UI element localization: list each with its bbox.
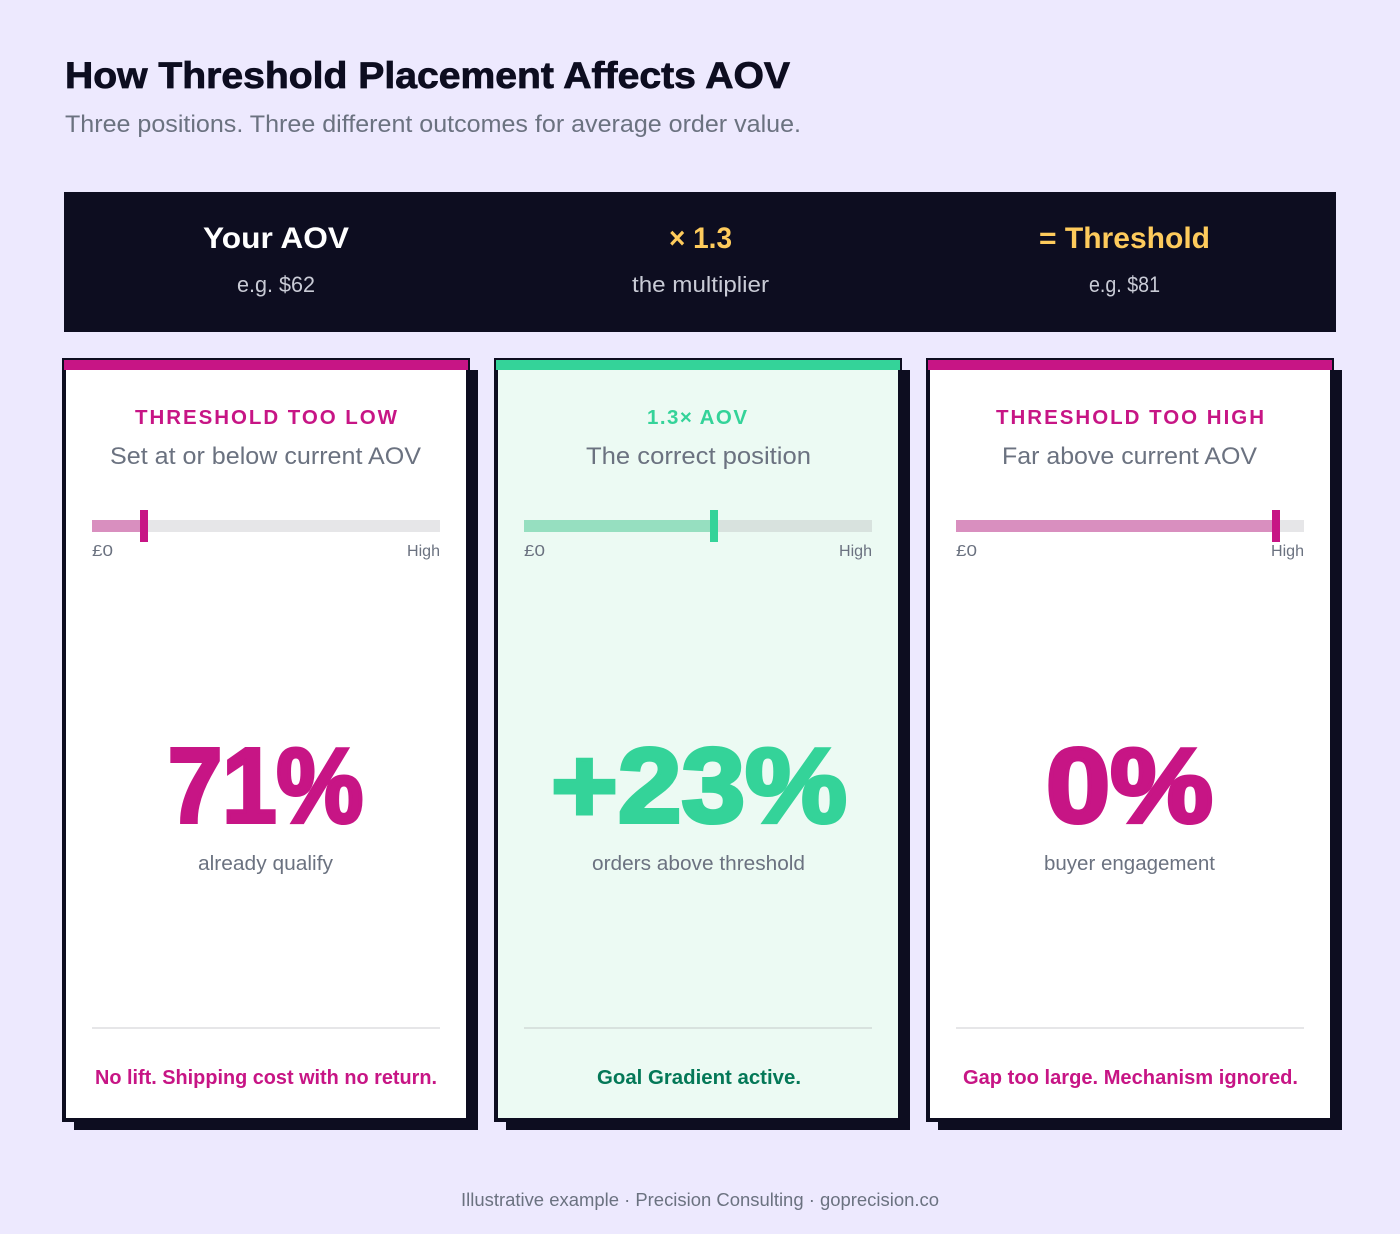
verdict: Gap too large. Mechanism ignored. bbox=[963, 1067, 1298, 1089]
panel description: Set at or below current AOV bbox=[110, 443, 421, 470]
panel heading: 1.3× AOV bbox=[647, 406, 747, 429]
formula: threshold: e.g. $81 bbox=[1089, 272, 1160, 297]
formula: your AOV bbox=[203, 222, 349, 297]
formula: your AOV: e.g. $62 bbox=[237, 272, 315, 297]
panel heading: THRESHOLD TOO LOW bbox=[135, 406, 398, 429]
formula: your AOV: Your AOV bbox=[203, 222, 349, 255]
panel heading: THRESHOLD TOO HIGH bbox=[996, 406, 1264, 429]
subtitle: Three positions. Three different outcomes for average order value. bbox=[65, 111, 801, 138]
big stat: 71% bbox=[168, 726, 363, 845]
formula: multiplier: the multiplier bbox=[632, 272, 769, 297]
title: How Threshold Placement Affects AOV bbox=[65, 54, 790, 96]
big stat: +23% bbox=[551, 727, 847, 845]
panel description: Far above current AOV bbox=[1002, 443, 1257, 470]
threshold slider: High bbox=[1271, 543, 1304, 560]
footer: Illustrative example · Precision Consulting · goprecision.co bbox=[461, 1190, 939, 1210]
formula: threshold: = Threshold bbox=[1039, 222, 1210, 255]
formula: multiplier: × 1.3 bbox=[669, 222, 732, 255]
threshold slider bbox=[92, 510, 440, 560]
panel description: The correct position bbox=[586, 443, 811, 470]
threshold slider: £0 bbox=[956, 543, 977, 560]
formula banner bbox=[64, 192, 1336, 332]
stat caption: buyer engagement bbox=[1044, 853, 1215, 875]
formula: multiplier bbox=[632, 222, 769, 297]
panel: threshold too low bbox=[62, 358, 478, 1130]
threshold slider: £0 bbox=[524, 543, 545, 560]
threshold slider bbox=[524, 510, 872, 560]
verdict: Goal Gradient active. bbox=[597, 1067, 801, 1089]
panel: correct position bbox=[494, 358, 910, 1130]
stat caption: already qualify bbox=[198, 853, 333, 875]
stat caption: orders above threshold bbox=[592, 853, 805, 875]
threshold slider: £0 bbox=[92, 543, 113, 560]
big stat: 0% bbox=[1046, 727, 1213, 845]
panel: threshold too high bbox=[926, 358, 1342, 1130]
threshold slider: High bbox=[839, 543, 872, 560]
verdict: No lift. Shipping cost with no return. bbox=[95, 1067, 437, 1089]
formula: threshold bbox=[1039, 222, 1210, 297]
threshold slider: High bbox=[407, 543, 440, 560]
threshold slider bbox=[956, 510, 1304, 560]
